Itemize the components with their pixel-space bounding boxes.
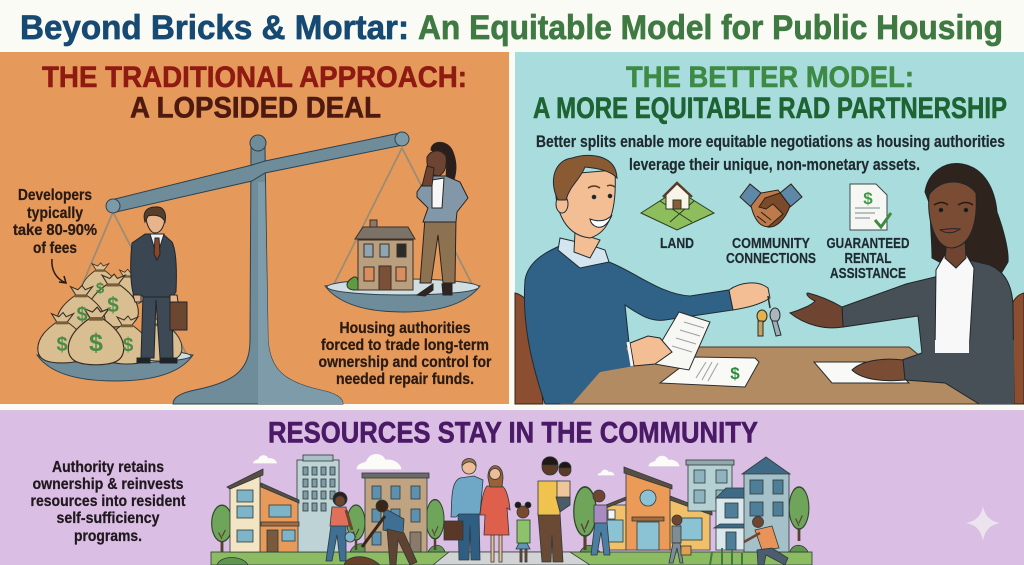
icon: sparkle	[966, 506, 1000, 541]
bushes	[217, 544, 808, 565]
text: developers fees: take 80-90%	[13, 222, 97, 239]
figure: developer	[131, 207, 187, 363]
icon: money bags	[38, 263, 182, 365]
asset labels: ASSISTANCE	[830, 266, 906, 282]
icon: money bags: $	[89, 329, 103, 357]
title: Beyond Bricks & Mortar:	[20, 9, 409, 47]
documents on table	[649, 312, 909, 387]
panel: community	[0, 410, 1024, 565]
person: gardener woman	[326, 492, 355, 561]
icon: land	[641, 183, 714, 230]
asset labels: RENTAL	[844, 251, 892, 267]
text: housing authorities: forced to trade long-term	[321, 337, 489, 354]
icon: money bags: $	[76, 304, 88, 326]
figure: woman reaching	[790, 164, 1014, 404]
trees	[212, 487, 809, 552]
heading: better model: THE BETTER MODEL:	[626, 61, 914, 94]
asset labels: CONNECTIONS	[726, 251, 816, 267]
building: pale blue	[686, 460, 734, 511]
icon: money bags: $	[107, 294, 119, 317]
panel: better model: $	[863, 189, 873, 208]
text: authority retains: resources into resident	[30, 493, 186, 510]
text: housing authorities	[318, 320, 492, 388]
asset labels: GUARANTEED	[826, 236, 910, 252]
icon: money bags: $	[56, 334, 68, 356]
icon: rental document	[850, 184, 891, 230]
heading: traditional approach: A LOPSIDED DEAL	[130, 92, 381, 124]
text: housing authorities: Housing authorities	[340, 320, 470, 337]
title	[20, 9, 1003, 47]
house: left orange and cream	[227, 469, 299, 552]
building: tall grey	[297, 455, 339, 552]
asset labels: LAND	[660, 236, 694, 252]
text: developers fees: of fees	[33, 240, 77, 257]
text: authority retains: Authority retains	[52, 459, 164, 476]
asset labels: COMMUNITY	[732, 236, 810, 252]
house: blue	[714, 457, 790, 552]
table	[562, 347, 979, 404]
heading: better model	[533, 61, 1007, 125]
house: right orange	[606, 467, 712, 550]
heading: community: RESOURCES STAY IN THE COMMUNITY	[268, 416, 758, 450]
figure: man with keys	[524, 155, 770, 404]
text: intro: leverage their unique, non-monetary assets.	[629, 155, 920, 174]
panel: better model	[515, 52, 1024, 404]
figure arms over table	[560, 336, 1014, 404]
clouds	[253, 454, 679, 475]
family	[444, 457, 571, 562]
text: intro	[536, 132, 1005, 174]
balance scale	[37, 132, 480, 404]
text: developers fees: Developers	[18, 187, 92, 204]
building: brown apartments	[362, 473, 429, 552]
asset labels	[660, 236, 910, 282]
person: woman with clipboard	[591, 490, 615, 555]
text: developers fees	[13, 187, 97, 257]
person: digging man	[344, 500, 417, 565]
text: housing authorities: needed repair funds.	[336, 371, 474, 388]
panel: traditional approach	[0, 52, 509, 404]
text: authority retains: ownership & reinvests	[32, 476, 184, 493]
person: child with bucket	[669, 515, 691, 563]
icon: keys	[757, 296, 781, 336]
text: housing authorities: ownership and control for	[318, 354, 492, 371]
heading: traditional approach	[42, 61, 467, 124]
text: developers fees: typically	[27, 205, 83, 222]
arrow: fees to bags	[52, 259, 66, 283]
chairs	[515, 293, 1024, 404]
panel: better model: $	[730, 364, 740, 383]
text: authority retains: self-sufficiency	[56, 510, 160, 527]
text: authority retains	[30, 459, 186, 545]
icon: money bags: $	[96, 280, 105, 297]
icon: money bags: $	[123, 335, 134, 356]
illustration: neighborhood	[211, 455, 812, 565]
text: authority retains: programs.	[74, 528, 142, 545]
person: kneeling gardener	[710, 516, 788, 565]
icon: dilapidated house	[347, 220, 415, 290]
icon: handshake	[740, 184, 802, 227]
heading: traditional approach: THE TRADITIONAL APPROACH:	[42, 61, 467, 94]
figure: housing authority woman	[417, 142, 468, 296]
